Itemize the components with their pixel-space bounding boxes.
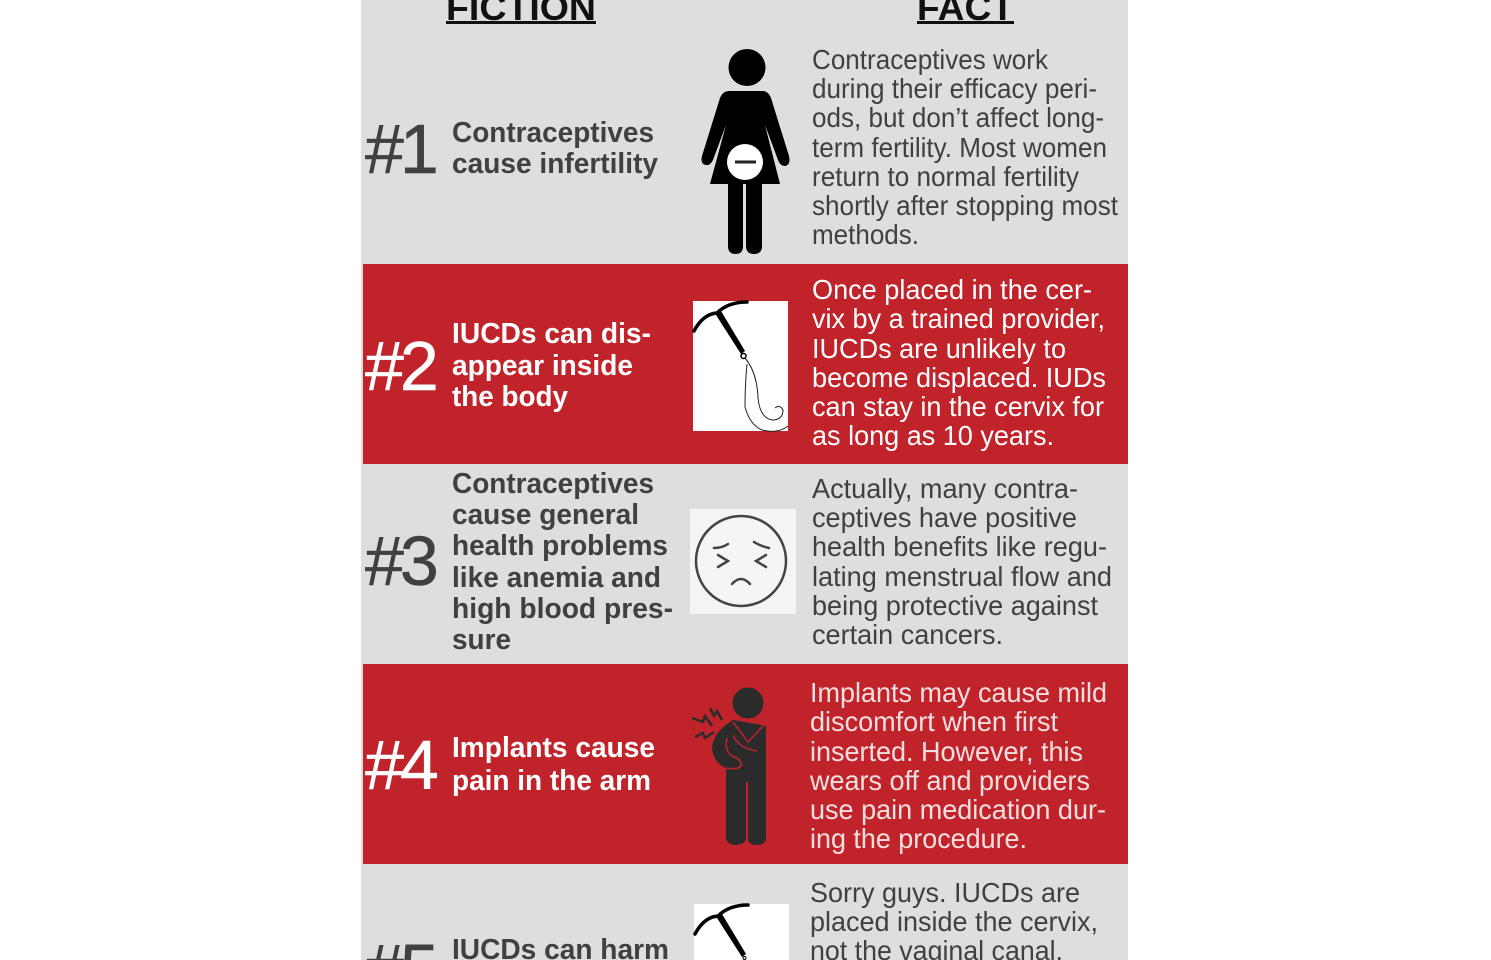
panel: row 4 <box>363 664 1128 864</box>
fact 2: as long as 10 years. <box>812 420 1054 451</box>
number 2: #2 <box>365 327 436 405</box>
fact 4: inserted. However, this <box>810 736 1083 767</box>
fiction 4: pain in the arm <box>452 765 651 797</box>
fiction 2: IUCDs can dis- <box>452 318 651 350</box>
fiction 3 <box>452 468 673 656</box>
fact 5: Sorry guys. IUCDs are <box>810 877 1080 908</box>
fact 4: ing the procedure. <box>810 823 1027 854</box>
fact 3: lating menstrual flow and <box>812 561 1112 592</box>
fact 4: Implants may cause mild <box>810 677 1107 708</box>
fact 2: become displaced. IUDs <box>812 362 1106 393</box>
fact 1: term fertility. Most women <box>812 132 1107 163</box>
fact 3 <box>812 473 1112 650</box>
fact 1: return to normal fertility <box>812 161 1079 192</box>
fact 3: ceptives have positive <box>812 502 1077 533</box>
fact 2: can stay in the cervix for <box>812 391 1104 422</box>
fiction 3: Contraceptives <box>452 468 654 500</box>
fiction 3: like anemia and <box>452 562 661 594</box>
fact 3: Actually, many contra- <box>812 473 1078 504</box>
fact 1 <box>812 44 1118 250</box>
fiction 4 <box>452 732 655 797</box>
panel: row 1 <box>365 44 1118 254</box>
fiction 2 <box>452 318 651 413</box>
icon: person with arm pain <box>692 688 766 845</box>
icon: IUD <box>694 904 789 960</box>
fiction 3: health problems <box>452 530 668 562</box>
fact 2: vix by a trained provider, <box>812 303 1105 334</box>
fact 1: during their efficacy peri- <box>812 73 1097 104</box>
panel: row 3 <box>365 468 1112 656</box>
icon: woman with minus sign <box>702 49 790 254</box>
fiction 3: sure <box>452 624 511 656</box>
fiction 1: Contraceptives <box>452 117 654 149</box>
icon: IUD <box>693 301 788 431</box>
fiction 3: cause general <box>452 499 639 531</box>
fact 4: discomfort when first <box>810 706 1058 737</box>
panel: grey background <box>361 0 1128 960</box>
number 3: #3 <box>365 522 436 600</box>
fact 1: shortly after stopping most <box>812 190 1118 221</box>
fact 1: Contraceptives work <box>812 44 1048 75</box>
panel: row 5 <box>365 877 1098 960</box>
number 4: #4 <box>365 726 437 804</box>
fact 2: Once placed in the cer- <box>812 274 1092 305</box>
fact 5: placed inside the cervix, <box>810 906 1098 937</box>
panel: row 2 <box>363 264 1128 464</box>
fact 5 <box>810 877 1098 960</box>
fact 3: health benefits like regu- <box>812 531 1107 562</box>
fact 3: certain cancers. <box>812 619 1003 650</box>
fiction 4: Implants cause <box>452 732 655 764</box>
fiction 1 <box>452 117 658 180</box>
fact 1: methods. <box>812 219 919 250</box>
fiction 2: appear inside <box>452 350 633 382</box>
fact 2: IUCDs are unlikely to <box>812 333 1066 364</box>
fiction 3: high blood pres- <box>452 593 673 625</box>
fact 4 <box>809 677 1107 854</box>
number 1: #1 <box>365 110 436 188</box>
fact 4: use pain medication dur- <box>810 794 1106 825</box>
fiction 1: cause infertility <box>452 148 658 180</box>
fact 1: ods, but don’t affect long- <box>812 102 1104 133</box>
icon: sad face <box>690 509 796 614</box>
fiction 2: the body <box>452 381 568 413</box>
fact 3: being protective against <box>812 590 1098 621</box>
fact 2 <box>812 274 1106 451</box>
fact 4: wears off and providers <box>809 765 1090 796</box>
